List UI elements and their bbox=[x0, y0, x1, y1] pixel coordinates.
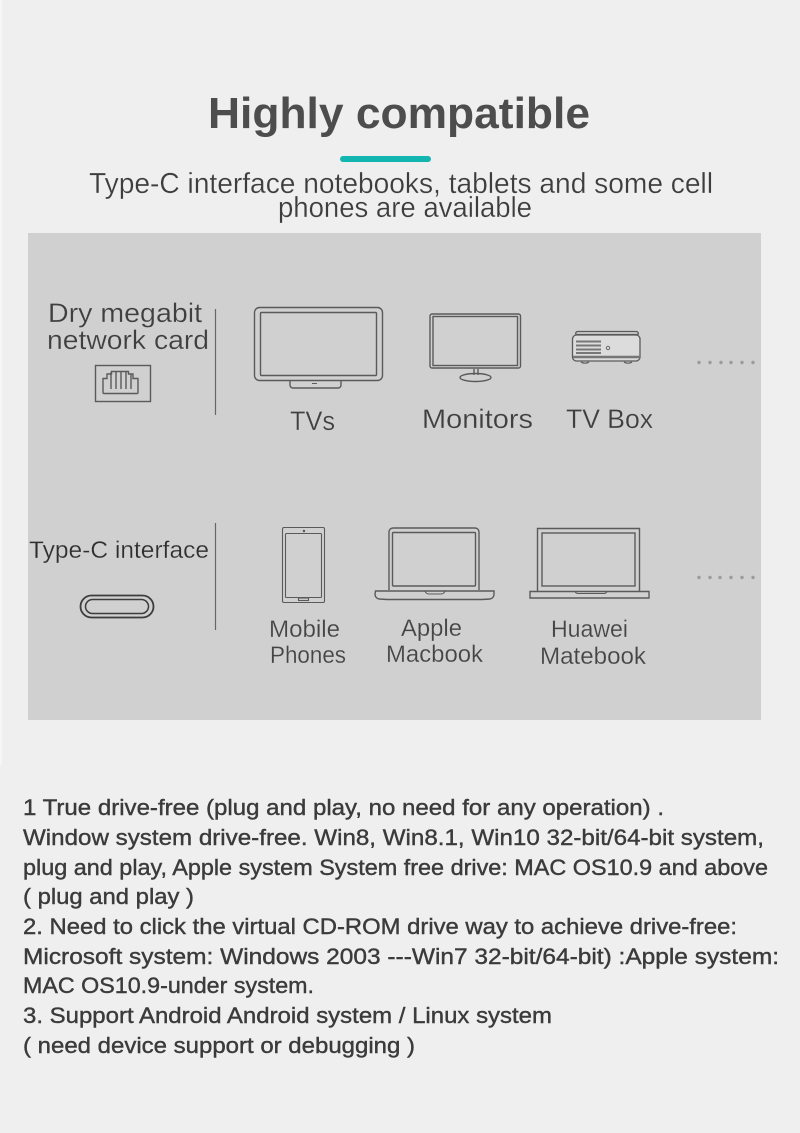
subtitle: Type-C interface notebooks, tablets and some cell bbox=[89, 168, 713, 200]
dots: more devices, row one bbox=[697, 361, 755, 364]
text block: driver and system support notes: 2. Need to click the virtual CD-ROM drive way to achieve drive-free: bbox=[23, 914, 737, 939]
text block: driver and system support notes: MAC OS10.9-under system. bbox=[23, 973, 314, 998]
subtitle: phones are available bbox=[278, 192, 532, 224]
icon: Type-C port bbox=[80, 596, 154, 618]
title accent bar bbox=[340, 156, 431, 162]
subtitle bbox=[89, 168, 713, 224]
icon: Apple Macbook bbox=[375, 528, 494, 600]
label: Monitors: Monitors bbox=[422, 404, 533, 434]
label: Huawei Matebook: Huawei bbox=[551, 616, 628, 643]
text block: driver and system support notes: Window system drive-free. Win8, Win8.1, Win10 32-bit/64-bit system, bbox=[23, 825, 764, 850]
divider: row one bbox=[214, 309, 216, 415]
label: Apple Macbook: Apple bbox=[401, 615, 462, 642]
label: Huawei Matebook bbox=[540, 616, 647, 670]
row label: dry megabit network card bbox=[47, 298, 209, 355]
icon: Huawei Matebook bbox=[530, 528, 649, 598]
label: Mobile Phones: Phones bbox=[270, 642, 346, 669]
text block: driver and system support notes: plug and play, Apple system System free drive: MAC OS10.9 and above bbox=[23, 855, 768, 880]
label: TVs: TVs bbox=[290, 406, 335, 436]
text block: driver and system support notes: ( need device support or debugging ) bbox=[23, 1033, 415, 1058]
dots: more devices, row two bbox=[697, 576, 755, 579]
text block: driver and system support notes: 3. Support Android Android system / Linux system bbox=[23, 1003, 552, 1028]
label: TV Box: TV Box bbox=[566, 404, 653, 434]
title: Highly compatible bbox=[208, 89, 590, 138]
text block: driver and system support notes: 1 True drive-free (plug and play, no need for any operation) . bbox=[23, 795, 664, 820]
text block: driver and system support notes bbox=[23, 795, 779, 1058]
row label: Type-C interface: Type-C interface bbox=[29, 537, 209, 564]
text block: driver and system support notes: ( plug and play ) bbox=[23, 884, 194, 909]
label: Huawei Matebook: Matebook bbox=[540, 643, 647, 670]
icon: monitor bbox=[430, 314, 520, 382]
label: Apple Macbook: Macbook bbox=[386, 641, 484, 668]
icon: TV box bbox=[572, 331, 640, 363]
panel: compatible devices bbox=[28, 233, 761, 720]
label: Apple Macbook bbox=[386, 615, 484, 668]
icon: mobile phone bbox=[282, 528, 324, 602]
text block: driver and system support notes: Microsoft system: Windows 2003 ---Win7 32-bit/64-bit) :Apple system: bbox=[23, 944, 779, 969]
row label: dry megabit network card: network card bbox=[47, 325, 209, 355]
label: Mobile Phones: Mobile bbox=[269, 616, 340, 643]
icon: ethernet port bbox=[96, 366, 150, 402]
label: Mobile Phones bbox=[269, 616, 346, 669]
divider: row two bbox=[214, 523, 216, 630]
icon: TV bbox=[254, 308, 382, 388]
row label: dry megabit network card: Dry megabit bbox=[48, 298, 203, 328]
